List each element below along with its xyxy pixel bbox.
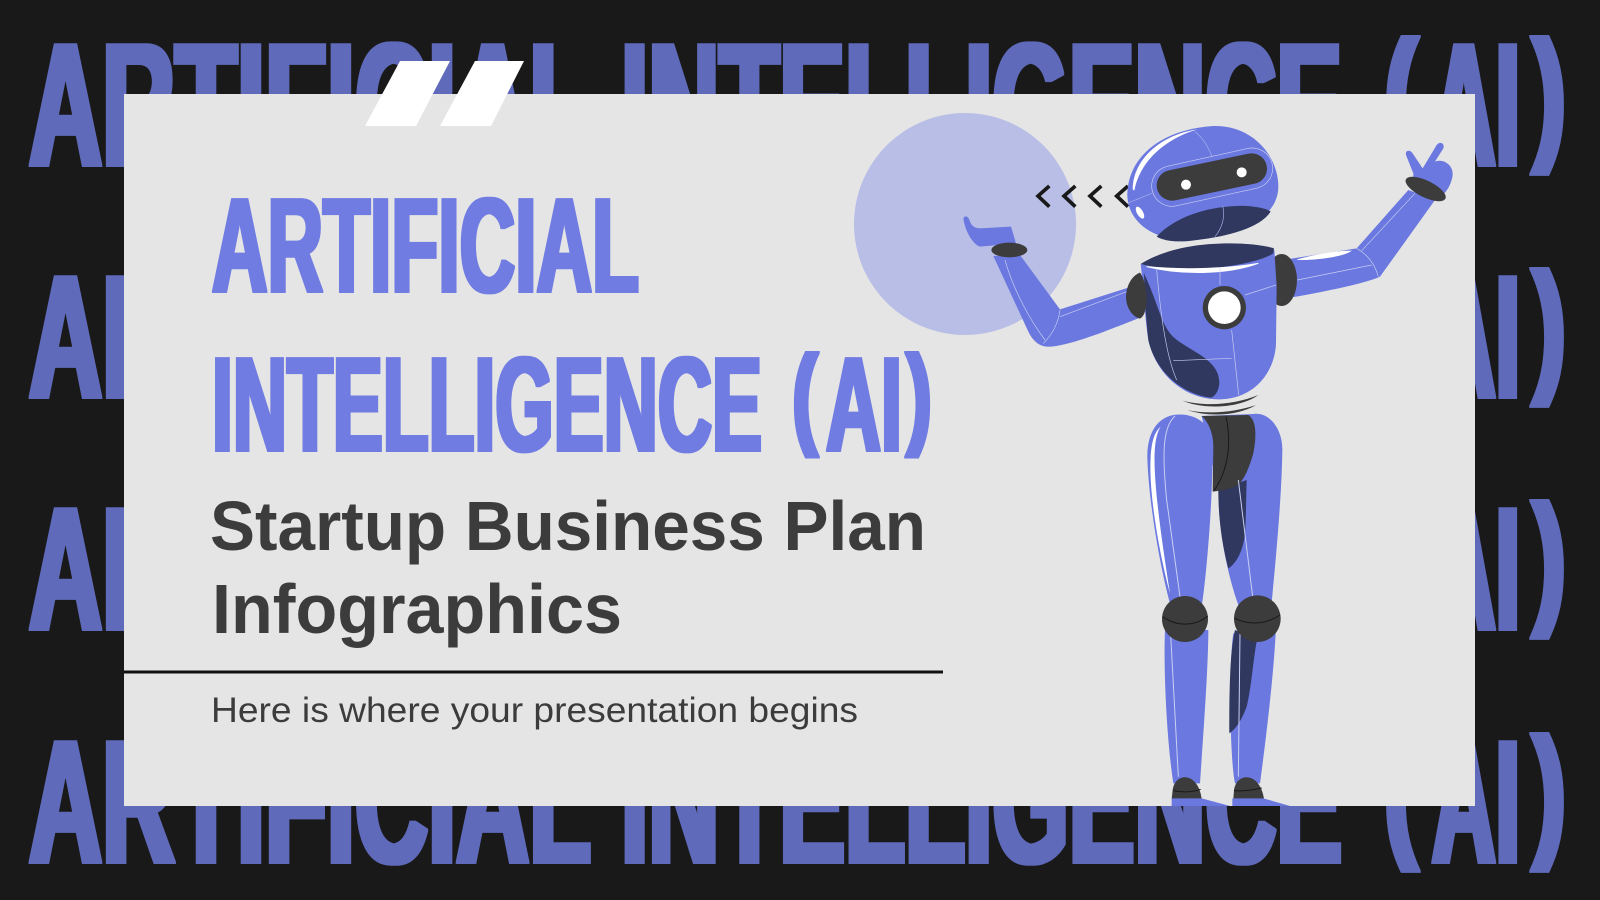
feet bbox=[1172, 777, 1290, 806]
background repeated text: ) bbox=[1532, 241, 1566, 408]
background repeated text: ARTIFICIAL bbox=[29, 238, 591, 436]
robot waist rings bbox=[1183, 395, 1258, 415]
title: AI bbox=[826, 329, 902, 480]
background repeated text: ) bbox=[1532, 9, 1566, 176]
icon: white quote marks bbox=[365, 61, 524, 126]
background repeated text: ARTIFICIAL bbox=[29, 703, 591, 900]
icon: chevrons bbox=[1038, 186, 1128, 207]
robot torso bbox=[1126, 243, 1277, 399]
title: ( bbox=[792, 332, 818, 458]
divider line bbox=[124, 670, 943, 674]
title: ARTIFICIAL bbox=[212, 170, 639, 321]
robot head bbox=[1127, 126, 1278, 241]
thighs bbox=[1147, 414, 1282, 777]
tagline: Here is where your presentation begins bbox=[211, 691, 858, 730]
decorative circle bbox=[854, 113, 1076, 335]
background repeated text: ( bbox=[1384, 241, 1418, 408]
subtitle heading: Infographics bbox=[212, 570, 622, 648]
title bbox=[212, 170, 932, 480]
background repeated text: ( bbox=[1384, 9, 1418, 176]
background repeated text: ARTIFICIAL bbox=[29, 6, 591, 204]
subtitle heading bbox=[210, 487, 926, 648]
knees bbox=[1162, 595, 1281, 642]
robot left arm bbox=[963, 216, 1138, 347]
title: INTELLIGENCE bbox=[212, 329, 762, 480]
main panel bbox=[124, 94, 1475, 806]
robot legs bbox=[1147, 414, 1290, 806]
robot right arm bbox=[1266, 143, 1453, 306]
robot illustration bbox=[963, 126, 1453, 806]
background repeated text: ARTIFICIAL bbox=[29, 470, 591, 668]
background repeated text: ( bbox=[1384, 706, 1418, 873]
subtitle heading: Startup Business Plan bbox=[210, 487, 926, 565]
background repeated text: ) bbox=[1532, 706, 1566, 873]
robot upper body bbox=[963, 126, 1453, 415]
background repeated text: ) bbox=[1532, 473, 1566, 640]
title: ) bbox=[906, 332, 932, 458]
background repeated text: ( bbox=[1384, 473, 1418, 640]
lower legs bbox=[1165, 630, 1276, 783]
